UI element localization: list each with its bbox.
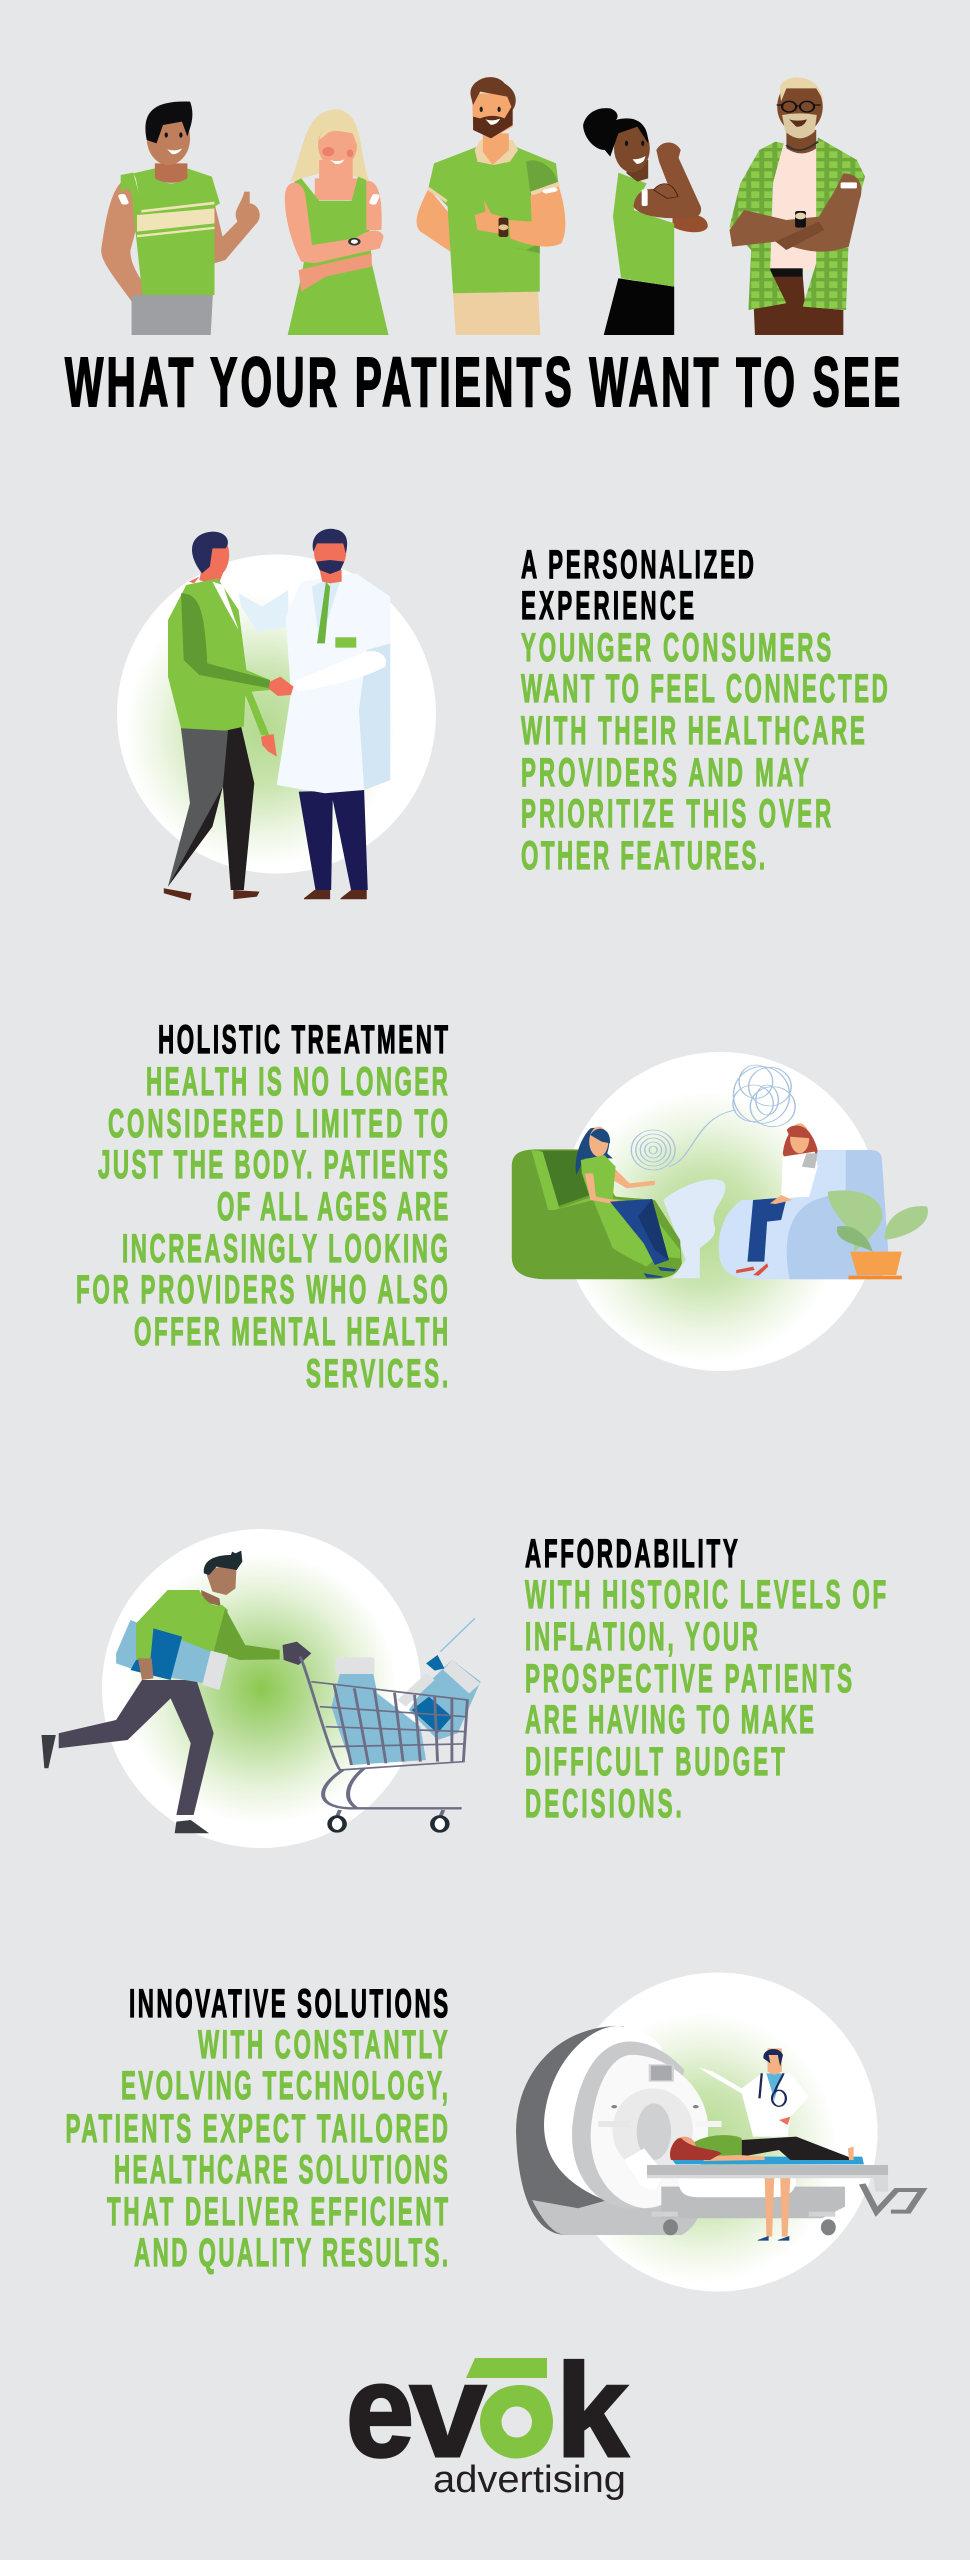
person: blonde woman in dress bbox=[285, 109, 389, 335]
panel: holistic treatment bbox=[76, 1017, 928, 1396]
illustration: man pushing shopping cart of medicine bbox=[41, 1529, 481, 1848]
panel: affordability bbox=[41, 1529, 886, 1848]
text: personalized experience description bbox=[521, 625, 888, 878]
text: affordability description bbox=[525, 1572, 886, 1826]
text: holistic treatment description: CONSIDERED LIMITED TO bbox=[108, 1101, 448, 1146]
panel: innovative solutions bbox=[66, 1972, 922, 2292]
text: innovative solutions description bbox=[66, 2022, 448, 2275]
text: innovative solutions description: HEALTHCARE SOLUTIONS bbox=[114, 2147, 448, 2192]
logo: evok advertising: o bbox=[483, 2337, 557, 2484]
text: holistic treatment description: JUST THE BODY. PATIENTS bbox=[98, 1142, 448, 1187]
text: holistic treatment description: FOR PROVIDERS WHO ALSO bbox=[76, 1267, 448, 1312]
logo: evok advertising bbox=[346, 2337, 629, 2501]
text: holistic treatment description: INCREASINGLY LOOKING bbox=[122, 1226, 448, 1271]
illustration: five vaccinated people bbox=[101, 77, 865, 335]
heading: a personalized experience bbox=[521, 542, 754, 628]
text: innovative solutions description: AND QUALITY RESULTS. bbox=[134, 2230, 448, 2275]
text: personalized experience description: WANT TO FEEL CONNECTED bbox=[521, 666, 888, 711]
logo: evok advertising: advertising bbox=[433, 2459, 626, 2501]
text: personalized experience description: PROVIDERS AND MAY bbox=[521, 750, 809, 795]
illustration: doctor with patient at MRI scanner bbox=[516, 1972, 922, 2292]
text: affordability description: PROSPECTIVE PATIENTS bbox=[525, 1656, 852, 1701]
illustration: patient shaking hands with doctor bbox=[117, 529, 436, 901]
person: woman flexing arm bbox=[583, 108, 708, 335]
heading: a personalized experience: A PERSONALIZED bbox=[521, 542, 754, 587]
heading: a personalized experience: EXPERIENCE bbox=[521, 583, 694, 628]
text: holistic treatment description: OFFER MENTAL HEALTH bbox=[134, 1309, 448, 1354]
text: innovative solutions description: WITH CONSTANTLY bbox=[198, 2022, 448, 2067]
logo: evok advertising: e bbox=[346, 2337, 414, 2484]
text: holistic treatment description: HEALTH IS NO LONGER bbox=[146, 1059, 448, 1104]
heading: innovative solutions: INNOVATIVE SOLUTIONS bbox=[129, 1981, 448, 2026]
heading: affordability: AFFORDABILITY bbox=[525, 1531, 738, 1576]
text: innovative solutions description: PATIENTS EXPECT TAILORED bbox=[66, 2106, 448, 2151]
heading: holistic treatment: HOLISTIC TREATMENT bbox=[158, 1017, 448, 1062]
text: affordability description: WITH HISTORIC LEVELS OF bbox=[525, 1572, 886, 1617]
text: personalized experience description: YOUNGER CONSUMERS bbox=[521, 625, 831, 670]
text: personalized experience description: OTHER FEATURES. bbox=[521, 833, 765, 878]
logo: evok advertising: k bbox=[556, 2337, 629, 2484]
text: innovative solutions description: THAT DELIVER EFFICIENT bbox=[107, 2189, 448, 2234]
text: affordability description: DECISIONS. bbox=[525, 1781, 682, 1826]
text: innovative solutions description: EVOLVING TECHNOLOGY, bbox=[121, 2063, 448, 2108]
text: affordability description: ARE HAVING TO MAKE bbox=[525, 1697, 814, 1742]
text: holistic treatment description bbox=[76, 1059, 448, 1396]
illustration: therapy session in armchairs bbox=[512, 1052, 928, 1371]
person: man giving thumbs up bbox=[101, 102, 260, 335]
text: holistic treatment description: OF ALL AGES ARE bbox=[217, 1184, 448, 1229]
person: bearded man in polo bbox=[417, 77, 565, 335]
logo: evok advertising: v bbox=[410, 2337, 486, 2484]
text: personalized experience description: WITH THEIR HEALTHCARE bbox=[521, 708, 865, 753]
panel: personalized experience bbox=[117, 529, 888, 901]
title: WHAT YOUR PATIENTS WANT TO SEE bbox=[65, 344, 900, 422]
text: holistic treatment description: SERVICES. bbox=[306, 1351, 448, 1396]
person: older man in plaid shirt bbox=[729, 77, 865, 335]
text: affordability description: DIFFICULT BUDGET bbox=[525, 1739, 785, 1784]
text: personalized experience description: PRIORITIZE THIS OVER bbox=[521, 791, 831, 836]
text: affordability description: INFLATION, YOUR bbox=[525, 1614, 758, 1659]
